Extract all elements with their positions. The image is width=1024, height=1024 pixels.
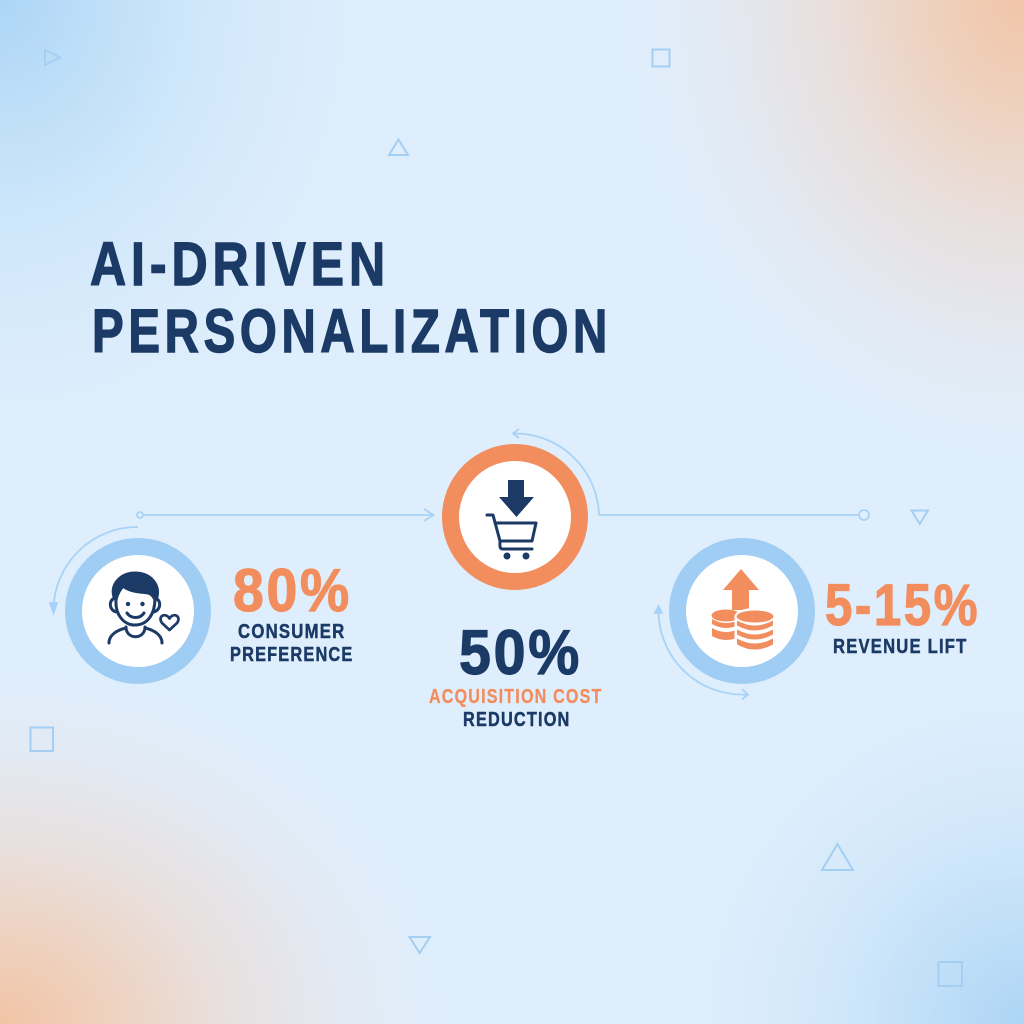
title: AI-DRIVEN [90, 230, 390, 298]
curved arrow around left circle [50, 527, 138, 613]
label: consumer preference: CONSUMER [238, 620, 346, 643]
title [90, 230, 612, 365]
blue ring [74, 546, 202, 676]
title: PERSONALIZATION [92, 297, 612, 365]
label: revenue lift: REVENUE LIFT [833, 635, 968, 658]
stat: 80%: 80% [233, 557, 352, 624]
label: consumer preference [230, 620, 354, 666]
connector line from centre circle to end node [599, 510, 869, 520]
icon: smiling person with heart [109, 573, 178, 643]
curved arrow around centre circle [513, 429, 599, 515]
panel: acquisition cost reduction [429, 429, 602, 731]
blue ring [678, 546, 806, 676]
label: acquisition cost: ACQUISITION COST [429, 685, 602, 708]
stat: 50%: 50% [459, 618, 582, 688]
panel: consumer preference [50, 527, 354, 676]
connector line with arrow into centre circle [137, 509, 434, 521]
icon: down arrow [499, 480, 534, 517]
label: reduction: REDUCTION [463, 708, 570, 731]
label: consumer preference: PREFERENCE [230, 643, 354, 666]
curved arrow around right circle [655, 606, 748, 700]
icon: coin stacks [712, 608, 776, 650]
orange ring [450, 452, 580, 582]
stat: 5-15%: 5-15% [825, 573, 980, 638]
panel: revenue lift [655, 546, 980, 700]
icon: shopping cart [487, 515, 536, 560]
icon: up arrow [723, 569, 759, 610]
